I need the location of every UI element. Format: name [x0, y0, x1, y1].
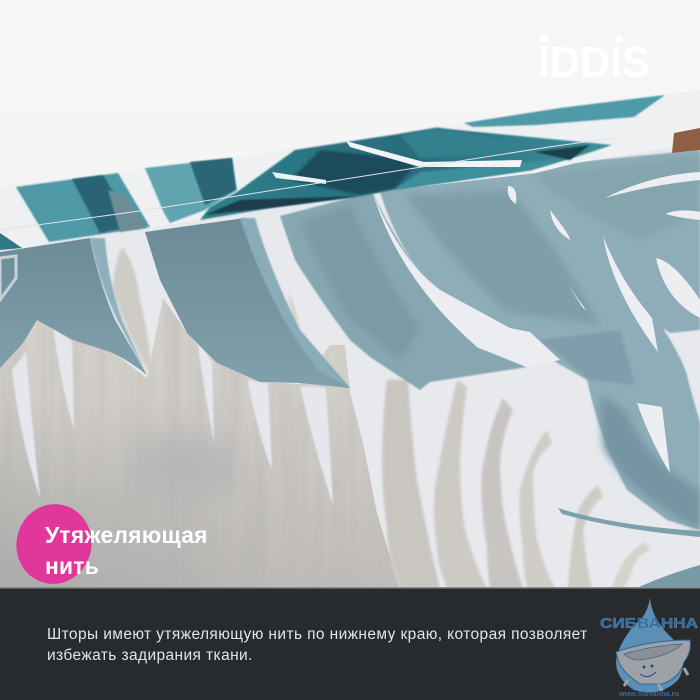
teal leaf left [0, 238, 147, 375]
frond in gap between leaves [113, 247, 152, 378]
leaf cutouts [508, 172, 700, 473]
dark caption band [0, 588, 700, 700]
hem teal block middle [145, 158, 237, 223]
logo: IDDIS: IDDIS [538, 38, 650, 87]
description text: Шторы имеют утяжеляющую нить по нижнему краю, которая позволяет [47, 626, 588, 643]
light slits between fronds [12, 328, 333, 505]
hem stitching [0, 137, 620, 230]
hem white streaks [346, 141, 522, 167]
teal leaf second [145, 218, 350, 388]
description text: избежать задирания ткани. [47, 647, 253, 664]
hem teal main folded leaf [200, 128, 612, 220]
logo: Sibvanna [600, 598, 698, 698]
teal leaf large centre and right [380, 150, 700, 530]
fabric streaks [8, 304, 240, 418]
logo url: www.sibvanna.ru [618, 691, 679, 698]
hem of the curtain [0, 90, 700, 250]
logo wordmark: СИБВАННА [600, 615, 698, 632]
pink ellipse badge [9, 497, 99, 591]
curtain lower layer base [0, 130, 700, 590]
hem corner teal [0, 233, 22, 250]
logo drop [616, 598, 683, 692]
teal leaf third [280, 192, 527, 390]
heading [45, 522, 208, 579]
beige palm fronds (right) [382, 380, 650, 588]
heading: Утяжеляющая [45, 522, 208, 548]
hem teal block left [16, 173, 150, 242]
white vein on leaf [373, 194, 560, 367]
description text [47, 626, 588, 664]
logo bath [616, 640, 690, 691]
hem upper teal leaf [464, 95, 665, 127]
hem brown spot [672, 128, 700, 153]
beige palm frond mass (left) [0, 298, 420, 590]
thin teal leaf blade [558, 508, 700, 537]
frond in gap between leaves right [288, 292, 332, 385]
teal leaf bottom right corner [637, 565, 700, 590]
heading: нить [45, 553, 99, 579]
darker lower-left fabric [0, 448, 272, 587]
